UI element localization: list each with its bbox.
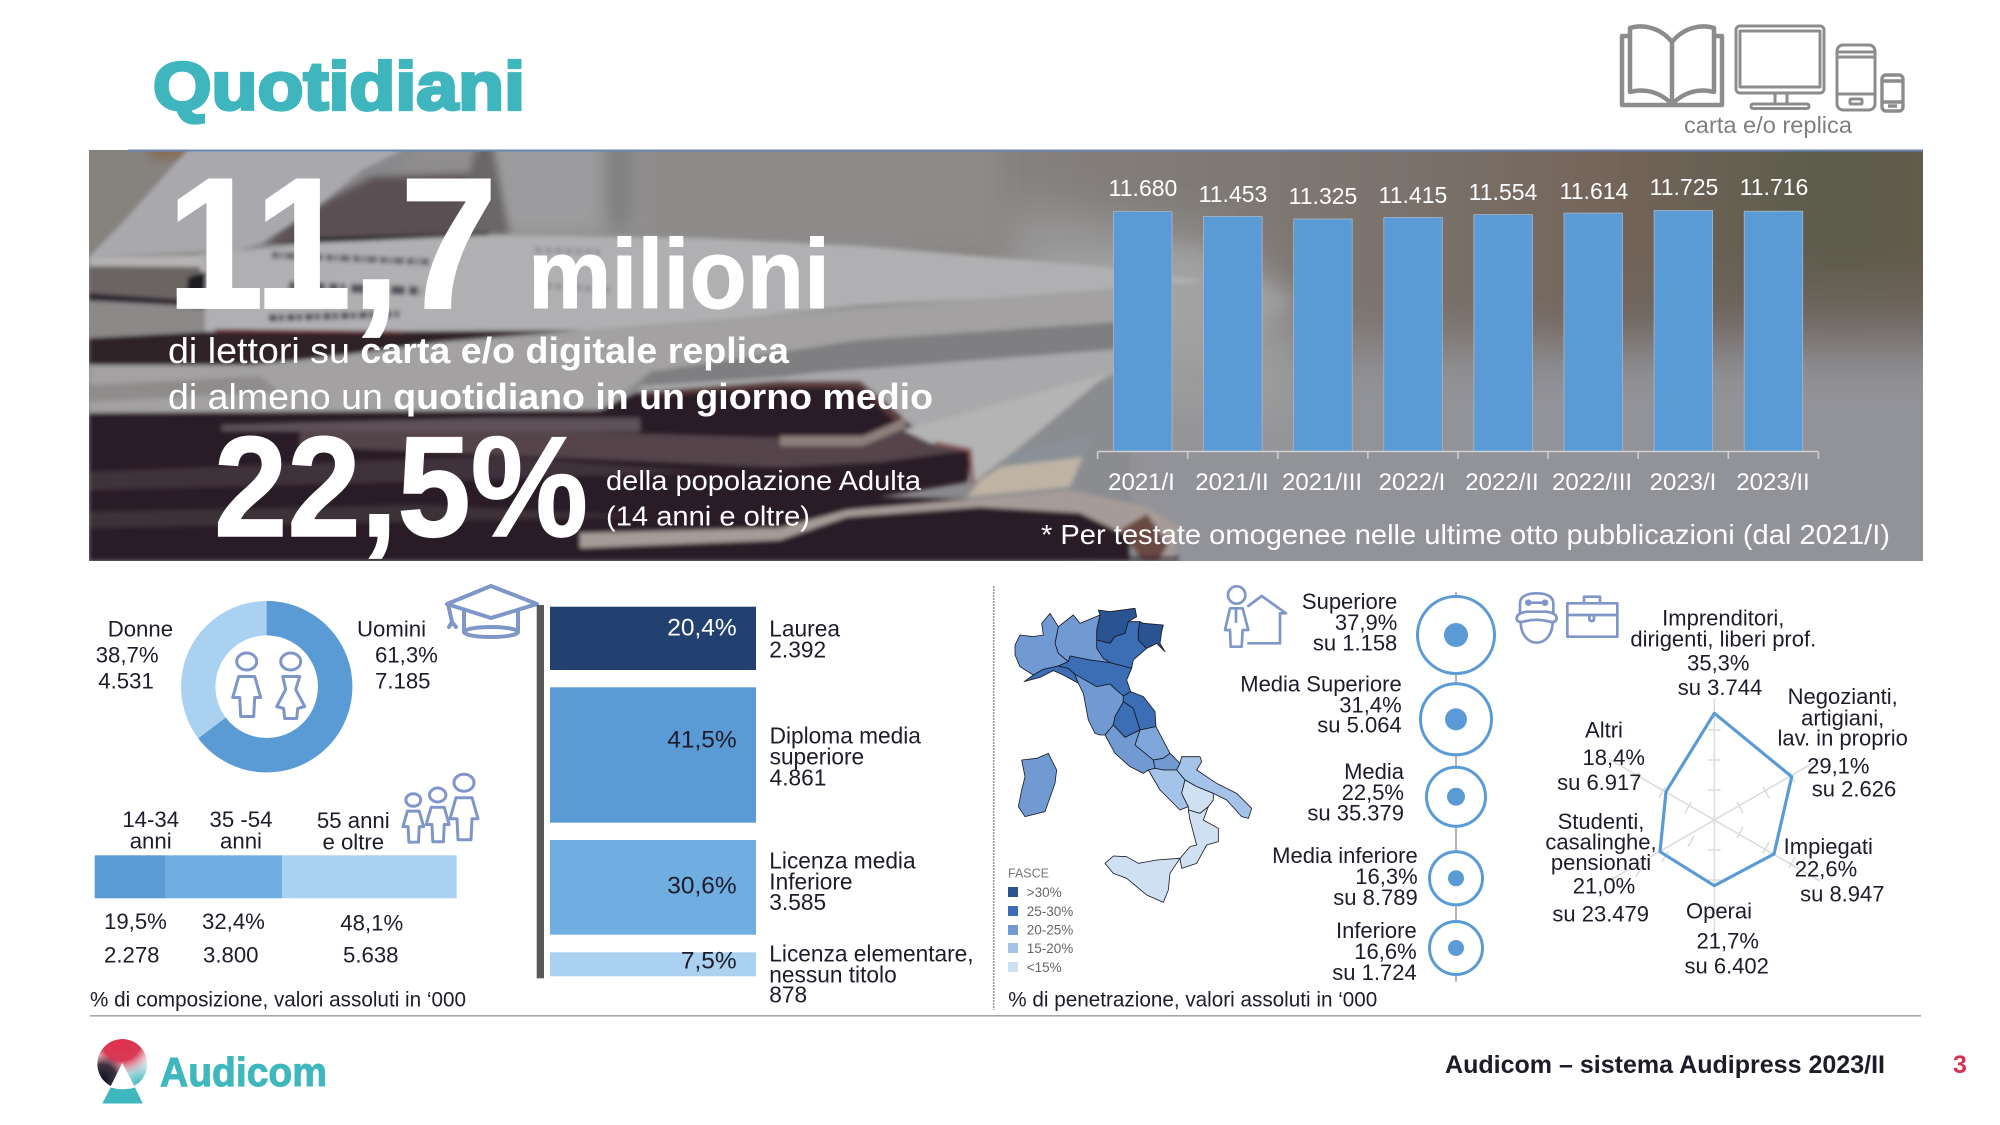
legend: map bands: 15-20% (1027, 941, 1073, 956)
bar: licenza media (550, 840, 756, 935)
label: women (96, 617, 173, 694)
icon: monitor (1736, 26, 1824, 108)
labels: licenza elementare: Licenza elementare, (769, 941, 974, 967)
legend: map bands: >30% (1027, 885, 1062, 900)
footer: source: Audicom – sistema Audipress 2023/II (1445, 1051, 1885, 1079)
labels: licenza elementare: nessun titolo (769, 961, 897, 987)
age labels: 14-34 (122, 807, 179, 832)
label: altri: 18,4% (1583, 745, 1645, 770)
label: studenti: Studenti, (1558, 809, 1644, 834)
bar values: 11.453 (1199, 181, 1267, 207)
label: women: 38,7% (96, 643, 159, 668)
label: impiegati: 22,6% (1795, 857, 1857, 882)
axis labels (1108, 469, 1810, 496)
labels: laurea (769, 616, 840, 662)
label: operai: 21,7% (1697, 928, 1759, 953)
age labels: 35 -54 (210, 807, 272, 832)
text block: adult population (606, 465, 922, 532)
labels: licenza media: Licenza media (769, 847, 916, 873)
axis labels: 2022/I (1379, 469, 1445, 496)
labels: superiore: su 1.158 (1313, 631, 1397, 656)
legend: map bands: 20-25% (1027, 922, 1073, 938)
labels: inferiore: su 1.724 (1332, 960, 1417, 985)
logo mark (97, 1039, 147, 1104)
dark main (89, 381, 1170, 561)
text block: readers description: di almeno un quotidiano in un giorno medio (168, 376, 933, 417)
vertical axis bar (537, 605, 544, 978)
labels: media: 22,5% (1342, 780, 1404, 805)
bar: licenza media: 30,6% (667, 872, 737, 899)
label: imprenditori (1630, 606, 1816, 700)
stat: 22,5%: 22,5% (214, 408, 588, 567)
axis labels: 2023/I (1650, 469, 1716, 496)
fold 3 lip (580, 490, 1180, 561)
text block: adult population: (14 anni e oltre) (606, 500, 810, 532)
labels: diploma: 4.861 (770, 764, 826, 790)
labels: media superiore (1240, 672, 1402, 738)
stacked bar (95, 855, 457, 898)
age values: 32,4% (202, 909, 265, 934)
circle: media inferiore (1430, 852, 1482, 905)
age labels: 55 anni (317, 808, 390, 833)
legend: map bands: <15% (1027, 960, 1062, 975)
panel: hero newspaper photo background (89, 150, 1923, 561)
label: negozianti: artigiani, (1801, 706, 1884, 731)
labels: media superiore: su 5.064 (1317, 713, 1402, 738)
icon: worker head (1517, 593, 1557, 643)
front paper (200, 235, 1200, 333)
label: men: Uomini (357, 617, 426, 642)
age labels (122, 807, 390, 854)
label: studenti: 21,0% (1573, 873, 1635, 898)
circle: superiore (1418, 596, 1494, 674)
icon: three people (403, 774, 478, 842)
paper fold top (89, 148, 406, 257)
labels: inferiore (1332, 918, 1417, 985)
bar values: 11.614 (1560, 178, 1629, 204)
logo: Audicom (97, 1039, 327, 1104)
label: impiegati (1784, 834, 1885, 907)
labels: diploma: Diploma media (770, 722, 921, 748)
scale axis (1455, 592, 1457, 982)
label: altri: Altri (1585, 717, 1623, 742)
icon: phone (1882, 75, 1903, 111)
axis (1098, 452, 1818, 459)
bar chart: readers per survey wave (1098, 174, 1818, 496)
label: imprenditori: Imprenditori, (1662, 606, 1784, 631)
label: imprenditori: 35,3% (1687, 651, 1749, 676)
labels: superiore: 37,9% (1335, 610, 1397, 635)
note: composition: % di composizione, valori assoluti in ‘000 (90, 989, 466, 1012)
icon: book (1622, 26, 1722, 105)
headline: 11,7 milioni (166, 139, 830, 348)
age values: 2.278 (104, 943, 160, 968)
labels: licenza media (769, 847, 916, 915)
bar: licenza elementare: 7,5% (681, 947, 737, 974)
labels: inferiore: Inferiore (1336, 918, 1417, 943)
panel: socio-economic level scale (1240, 589, 1494, 985)
label: studenti (1545, 809, 1657, 927)
age values: 3.800 (203, 943, 259, 968)
panel: gender donut (96, 617, 438, 755)
labels: licenza media: 3.585 (769, 889, 826, 915)
page number: 3 (1953, 1051, 1967, 1079)
labels: inferiore: 16,6% (1354, 939, 1417, 964)
label: men: 7.185 (375, 669, 431, 694)
label: men (357, 617, 438, 694)
label: women: 4.531 (98, 669, 154, 694)
headline: 11,7 milioni: milioni (528, 219, 830, 329)
labels: media inferiore: Media inferiore (1272, 843, 1418, 868)
label: impiegati: su 8.947 (1800, 882, 1885, 907)
left block (89, 255, 205, 272)
icon group: carta e/o replica (1622, 26, 1903, 138)
circle: media superiore (1420, 684, 1492, 755)
labels: media: Media (1344, 759, 1405, 784)
label: imprenditori: su 3.744 (1678, 675, 1762, 700)
label: altri (1557, 717, 1645, 795)
axis labels: 2021/III (1282, 469, 1362, 496)
label: negozianti (1777, 684, 1908, 802)
bar values: 11.415 (1379, 182, 1447, 208)
radar grid (1609, 698, 1820, 942)
footnote: * Per testate omogenee nelle ultime otto pubblicazioni (dal 2021/I) (1041, 519, 1890, 550)
fold 2 (903, 373, 1110, 483)
labels: laurea: 2.392 (769, 636, 826, 662)
age labels: e oltre (322, 829, 384, 854)
label: operai: Operai (1686, 898, 1752, 923)
labels: media superiore: Media Superiore (1240, 672, 1402, 697)
labels: superiore: Superiore (1302, 589, 1397, 614)
age values: 5.638 (343, 943, 399, 968)
label: studenti: pensionati (1551, 850, 1651, 875)
note: penetration: % di penetrazione, valori assoluti in ‘000 (1008, 989, 1377, 1012)
radar polyline (1660, 713, 1792, 886)
rim & fold stripes (300, 420, 970, 467)
label: negozianti: 29,1% (1807, 753, 1869, 778)
title: Quotidiani (153, 48, 525, 124)
axis labels: 2022/II (1465, 469, 1539, 496)
panel: age composition (90, 774, 478, 1012)
label: negozianti: Negozianti, (1788, 684, 1898, 709)
labels: media inferiore: su 8.789 (1333, 885, 1418, 910)
label: studenti: su 23.479 (1552, 902, 1649, 927)
label: negozianti: su 2.626 (1812, 777, 1896, 802)
labels: superiore (1302, 589, 1397, 656)
labels: diploma (770, 722, 921, 790)
bar values: 11.716 (1740, 174, 1808, 200)
legend: map bands: 25-30% (1027, 904, 1073, 919)
age labels: anni (130, 828, 172, 853)
legend: map bands (1008, 866, 1073, 975)
dark strip (89, 330, 610, 365)
bar values: 11.325 (1289, 183, 1357, 209)
icon caption: carta e/o replica (1684, 112, 1853, 138)
chart: donut (198, 618, 335, 755)
label: men: 61,3% (375, 643, 438, 668)
label: operai (1684, 898, 1769, 978)
bar: diploma (550, 687, 756, 823)
axis labels: 2021/I (1108, 469, 1175, 496)
labels: laurea: Laurea (769, 616, 840, 642)
bar values: 11.725 (1650, 174, 1718, 200)
bar values: 11.554 (1469, 179, 1538, 205)
labels: diploma: superiore (770, 744, 864, 770)
text block: adult population: della popolazione Adulta (606, 465, 922, 496)
age values: 48,1% (340, 911, 403, 936)
logo wordmark: Audicom (160, 1049, 327, 1095)
band 2 (89, 282, 1200, 413)
label: imprenditori: dirigenti, liberi prof. (1630, 627, 1816, 652)
bar: laurea: 20,4% (667, 615, 737, 642)
axis labels: 2021/II (1195, 469, 1269, 496)
chart: occupation radar (1545, 606, 1908, 978)
label: studenti: casalinghe, (1545, 829, 1657, 854)
label: operai: su 6.402 (1684, 953, 1769, 978)
icon: briefcase (1567, 597, 1617, 637)
labels: media: su 35.379 (1307, 801, 1404, 826)
map: Italy regions (1015, 608, 1252, 902)
labels: licenza elementare (769, 941, 974, 1008)
bar values (1109, 174, 1808, 209)
newsprint marks (272, 255, 429, 262)
legend: map bands: FASCE (1008, 866, 1049, 880)
axis labels: 2022/III (1552, 469, 1632, 496)
age values: 19,5% (104, 909, 167, 934)
panel: education levels (537, 605, 974, 1008)
icon: woman (277, 653, 305, 718)
bars (1114, 210, 1803, 451)
bar values: 11.680 (1109, 175, 1177, 201)
bar: licenza elementare (550, 947, 756, 976)
text block: readers description (168, 330, 933, 417)
labels: media inferiore: 16,3% (1355, 864, 1418, 889)
label: women: Donne (108, 617, 173, 642)
label: negozianti: lav. in proprio (1777, 726, 1908, 751)
age values (104, 909, 403, 968)
text block: readers description: di lettori su carta e/o digitale replica (168, 330, 790, 371)
axis labels: 2023/II (1736, 469, 1810, 496)
labels: licenza elementare: 878 (769, 982, 807, 1008)
line: hero top edge (128, 150, 1923, 152)
labels: media superiore: 31,4% (1339, 693, 1402, 718)
age labels: anni (220, 828, 262, 853)
label: altri: su 6.917 (1557, 770, 1642, 795)
bar: diploma: 41,5% (667, 727, 737, 754)
circle: media (1426, 767, 1486, 826)
labels: media inferiore (1272, 843, 1418, 910)
upper right of pocket (640, 322, 1120, 386)
icon: tablet (1837, 45, 1875, 110)
labels: licenza media: Inferiore (769, 868, 853, 894)
labels: media (1307, 759, 1405, 826)
bar: laurea (550, 607, 756, 670)
icon: man (233, 653, 261, 716)
circle: inferiore (1430, 922, 1482, 974)
icon: graduation cap (447, 586, 537, 637)
headline: 11,7 milioni: 11,7 (166, 139, 498, 348)
icon: person and house (1225, 586, 1286, 647)
label: impiegati: Impiegati (1784, 834, 1873, 859)
